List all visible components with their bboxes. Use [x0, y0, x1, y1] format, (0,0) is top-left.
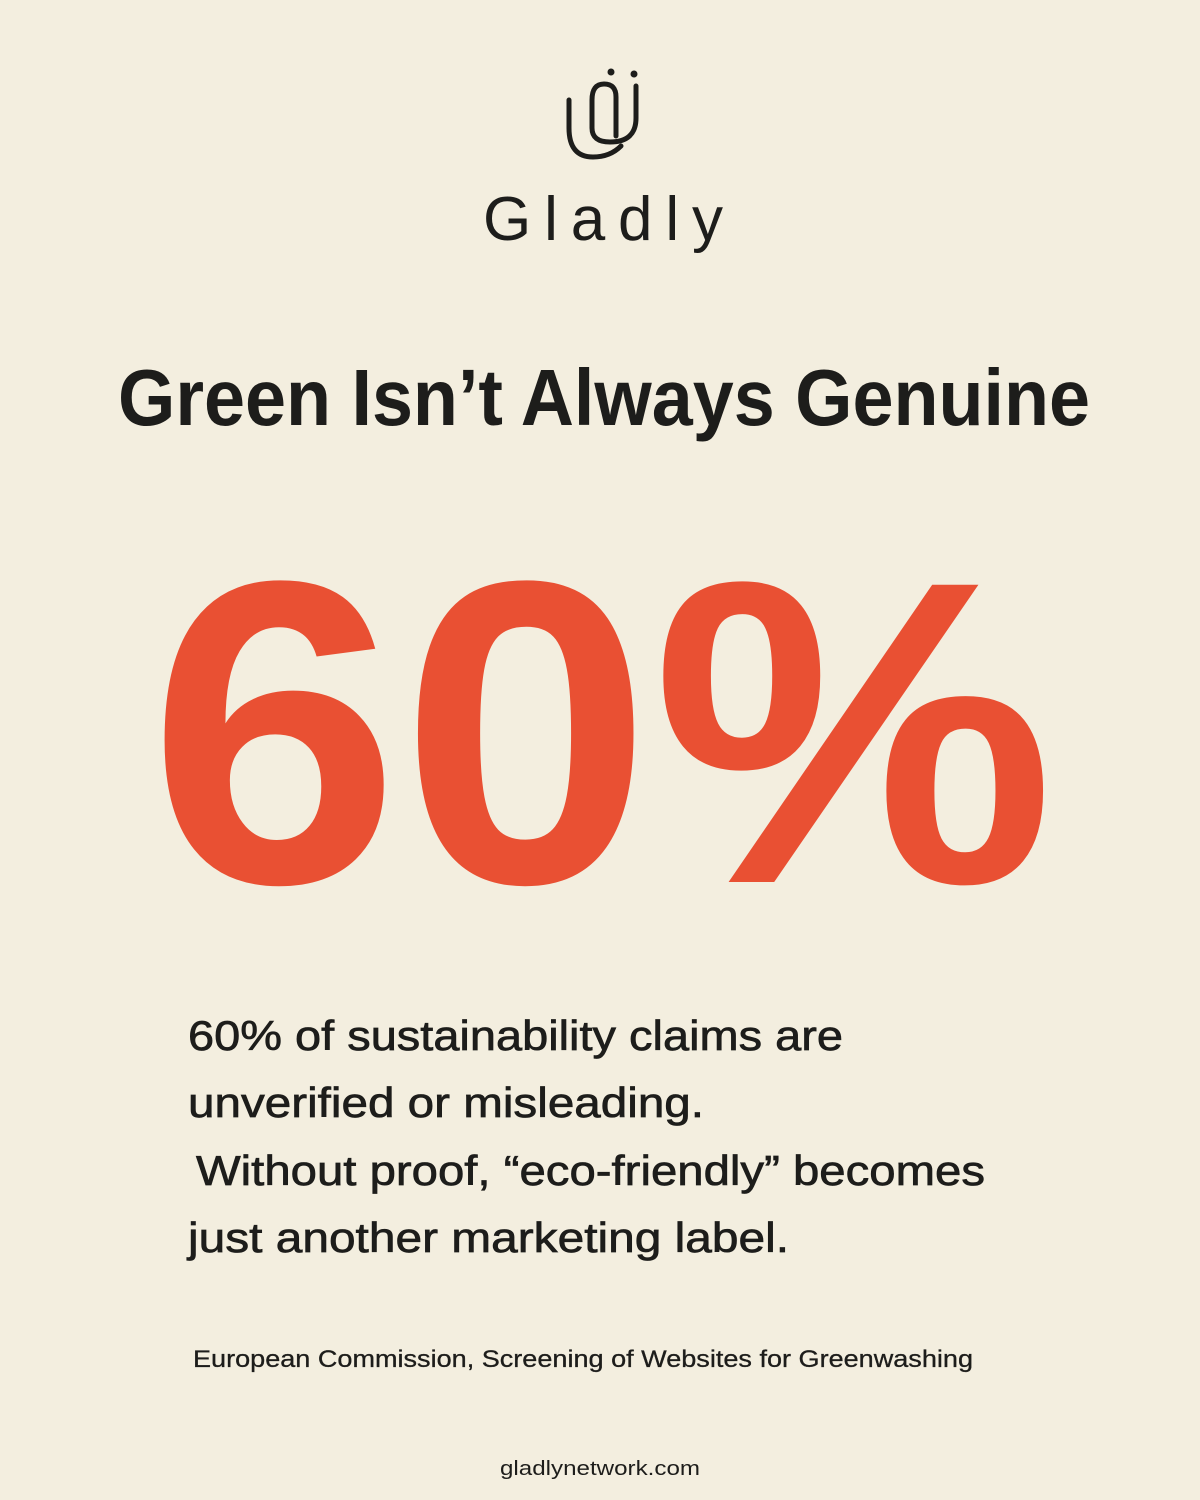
- icon: gladly mark: [569, 68, 638, 157]
- body text: 60% of sustainability claims are: [188, 1012, 843, 1059]
- body text: just another marketing label.: [186, 1214, 789, 1261]
- footer url: gladlynetwork.com: [500, 1458, 700, 1480]
- source: European Commission, Screening of Websites for Greenwashing: [193, 1346, 973, 1373]
- title: Green Isn’t Always Genuine: [118, 353, 1090, 442]
- logo: [483, 68, 723, 254]
- body text: [186, 1012, 985, 1261]
- big stat: 60%: [148, 491, 1055, 974]
- body text: Without proof, “eco-friendly” becomes: [196, 1147, 985, 1194]
- body text: unverified or misleading.: [188, 1079, 704, 1126]
- wordmark: Gladly: [483, 185, 723, 254]
